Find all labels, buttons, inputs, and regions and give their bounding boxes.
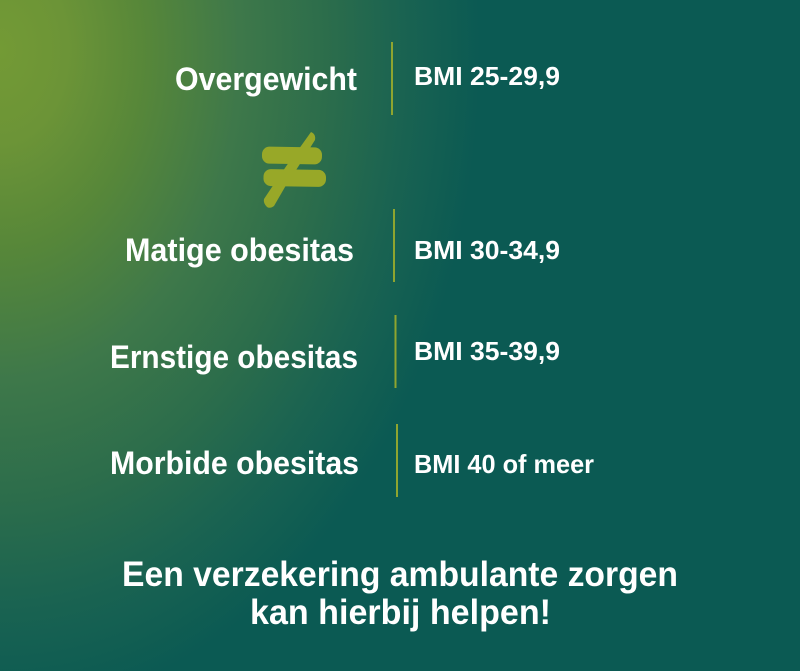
closing line 2: kan hierbij helpen! [250,593,551,632]
label: Morbide obesitas: Morbide obesitas [110,445,359,481]
icon: not equal sign [262,132,326,208]
closing message [122,555,678,632]
value: BMI 40 of meer: BMI 40 of meer [414,449,594,479]
row: Matige obesitas [125,209,560,282]
label: Matige obesitas: Matige obesitas [125,232,354,268]
row: Morbide obesitas [110,424,594,497]
value: BMI 25-29,9: BMI 25-29,9 [414,61,560,91]
divider: Overgewicht [391,42,393,115]
divider: Matige obesitas [393,209,395,282]
divider: Ernstige obesitas [394,315,396,388]
label: Overgewicht: Overgewicht [175,61,357,97]
row: Ernstige obesitas [110,315,560,388]
divider: Morbide obesitas [396,424,398,497]
row: Overgewicht [175,42,560,115]
closing line 1: Een verzekering ambulante zorgen [122,555,678,594]
label: Ernstige obesitas: Ernstige obesitas [110,339,358,375]
value: BMI 35-39,9: BMI 35-39,9 [414,336,560,366]
value: BMI 30-34,9: BMI 30-34,9 [414,235,560,265]
